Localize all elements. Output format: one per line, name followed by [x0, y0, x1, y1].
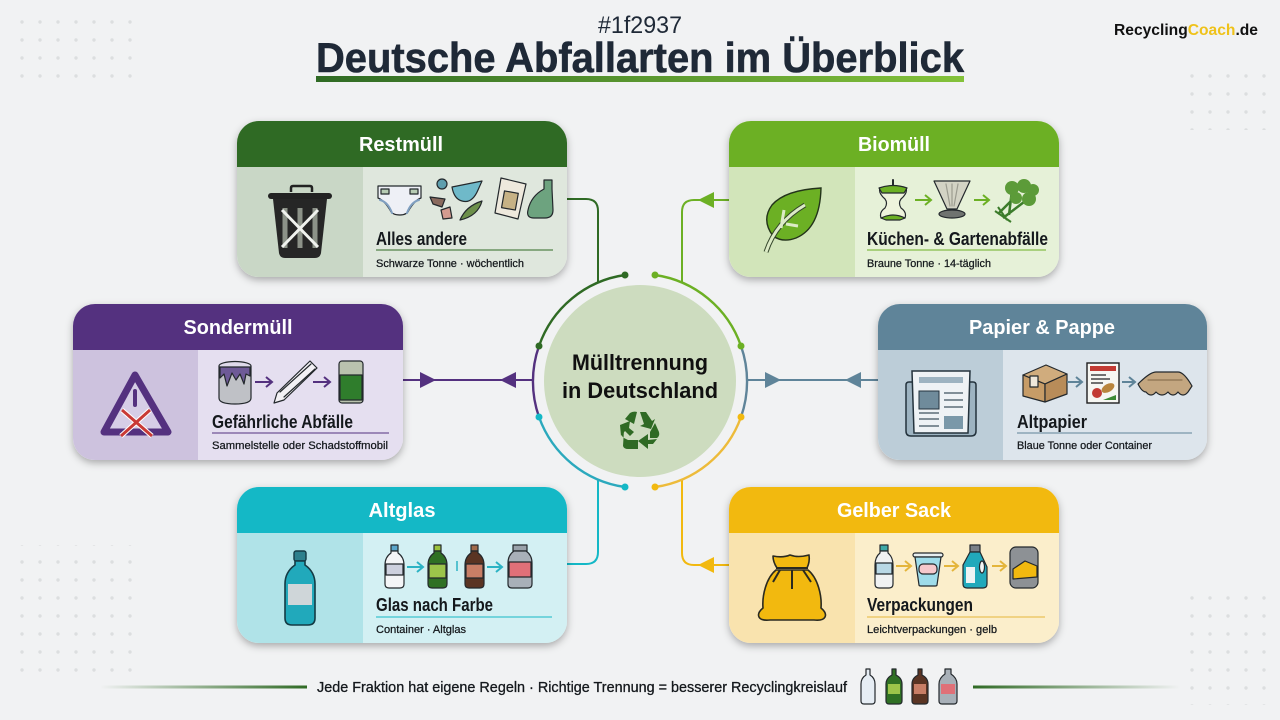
panel: Papier & Pappe	[878, 304, 1207, 460]
subheading: Verpackungen	[867, 595, 973, 615]
colour code caption: #1f2937	[598, 12, 682, 39]
icon: cardboard box	[1023, 365, 1067, 402]
subheading: Altpapier	[1017, 412, 1087, 432]
central hub: in Deutschland	[562, 378, 718, 403]
arrow	[974, 195, 989, 205]
detail text: Sammelstelle oder Schadstoffmobil	[212, 440, 388, 452]
panel: Restmüll	[237, 121, 567, 277]
connector: Papier	[747, 372, 878, 388]
icon: diaper	[378, 186, 421, 215]
detail text: Leichtverpackungen · gelb	[867, 624, 997, 636]
arrow	[255, 377, 272, 387]
arrow	[487, 562, 502, 572]
central hub	[533, 272, 747, 490]
heading: Gelber Sack	[837, 500, 952, 522]
icon: battery can	[339, 361, 363, 403]
icon: tin can	[1010, 547, 1038, 588]
arrow	[944, 561, 958, 571]
icon: green bottle	[428, 545, 447, 588]
footer	[100, 669, 1180, 704]
icon: leaf	[766, 188, 821, 252]
icon: grey bottle	[508, 545, 532, 588]
panel: Altglas	[237, 487, 567, 643]
connector: Restmüll	[567, 199, 598, 282]
title block	[316, 12, 965, 82]
panel: Sondermüll	[73, 304, 403, 460]
heading: Altglas	[368, 500, 436, 522]
icon: white bottle	[385, 545, 404, 588]
icon: brown bottle	[465, 545, 484, 588]
icon: coffee filter	[934, 181, 970, 218]
connector: Altglas	[567, 480, 598, 564]
connector: Biomüll	[682, 192, 729, 282]
heading: Restmüll	[359, 134, 443, 156]
arrow	[896, 561, 911, 571]
logo: RecyclingCoach.de	[1114, 22, 1258, 39]
icon: pencil	[274, 361, 317, 403]
icon: paint can	[219, 362, 251, 404]
icon: newspaper	[906, 371, 976, 436]
heading: Papier & Pappe	[969, 317, 1115, 339]
icon: egg carton	[1138, 372, 1192, 395]
connector: Sondermüll	[403, 372, 533, 388]
detail text: Container · Altglas	[376, 624, 466, 636]
detail text: Schwarze Tonne · wöchentlich	[376, 258, 524, 270]
icon: large bottle	[285, 551, 315, 625]
arrow	[915, 195, 931, 205]
footer text: Jede Fraktion hat eigene Regeln · Richtige Trennung = besserer Recyclingkreislauf	[317, 679, 848, 696]
hub label: Mülltrennung	[572, 350, 708, 375]
arrow	[313, 377, 330, 387]
icon: recycling symbol	[620, 412, 659, 449]
icon: flyer	[1087, 363, 1119, 403]
icon: card and bottle	[495, 178, 553, 219]
icon: apple core	[879, 180, 907, 220]
subheading: Küchen- & Gartenabfälle	[867, 229, 1048, 249]
icon: crossed-out bin	[268, 186, 332, 258]
detail text: Blaue Tonne oder Container	[1017, 440, 1152, 452]
title underline	[316, 76, 964, 82]
panel: Gelber Sack	[729, 487, 1059, 643]
icon: hazard triangle	[104, 375, 168, 436]
connector: Gelber Sack	[682, 480, 729, 573]
detail text: Braune Tonne · 14-täglich	[867, 258, 991, 270]
arrow	[992, 561, 1006, 571]
heading: Biomüll	[858, 134, 930, 156]
icon: footer bottles	[861, 669, 957, 704]
subheading: Gefährliche Abfälle	[212, 412, 353, 432]
icon: plastic bottle	[875, 545, 893, 588]
arrow	[1067, 377, 1082, 387]
arrow	[1122, 377, 1135, 387]
icon: mixed waste	[430, 179, 482, 220]
arrow	[407, 562, 423, 572]
panel: Biomüll	[729, 121, 1059, 277]
hub ring	[533, 272, 747, 490]
icon: detergent bottle	[963, 545, 987, 588]
main title: Deutsche Abfallarten im Überblick	[316, 34, 965, 81]
icon: herbs	[995, 179, 1039, 222]
hub disc	[544, 285, 736, 477]
subheading: Alles andere	[376, 229, 467, 249]
subheading: Glas nach Farbe	[376, 595, 493, 615]
heading: Sondermüll	[184, 317, 292, 339]
icon: yogurt cup	[913, 553, 943, 586]
icon: yellow sack	[758, 555, 826, 620]
